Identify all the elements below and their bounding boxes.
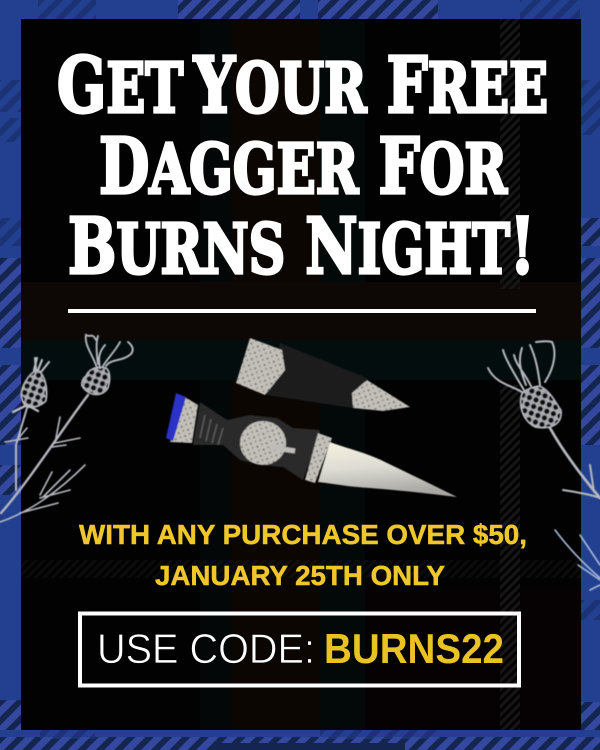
code value: BURNS22 xyxy=(324,625,504,672)
crest xyxy=(240,421,286,465)
dagger sheath xyxy=(236,338,410,411)
crest pin xyxy=(270,447,295,451)
title line 1: GET YOUR FREE xyxy=(57,41,548,131)
thistle head xyxy=(521,386,561,428)
title line 3: BURNS NIGHT! xyxy=(68,202,535,292)
sheath body xyxy=(267,343,367,408)
title xyxy=(57,41,548,292)
title line 2: DAGGER FOR xyxy=(99,122,507,212)
dagger xyxy=(166,393,457,497)
silver pommel xyxy=(170,397,198,443)
thistle head large xyxy=(82,367,110,395)
icon: right thistle xyxy=(488,341,600,590)
offer text xyxy=(79,519,527,591)
blue gem xyxy=(166,393,186,441)
divider line xyxy=(68,309,536,313)
offer line 2: JANUARY 25TH ONLY xyxy=(155,560,445,591)
handle xyxy=(193,402,320,480)
blade xyxy=(318,442,457,497)
silver collar xyxy=(305,433,332,483)
thistle head small xyxy=(21,370,47,407)
promo code box xyxy=(80,614,519,686)
offer line 1: WITH ANY PURCHASE OVER $50, xyxy=(79,519,527,550)
handle grooves xyxy=(200,415,223,445)
icon: left thistle xyxy=(0,335,133,522)
sheath top fitting xyxy=(236,338,285,395)
use code label: USE CODE: xyxy=(97,625,315,672)
sheath tip xyxy=(352,380,410,411)
